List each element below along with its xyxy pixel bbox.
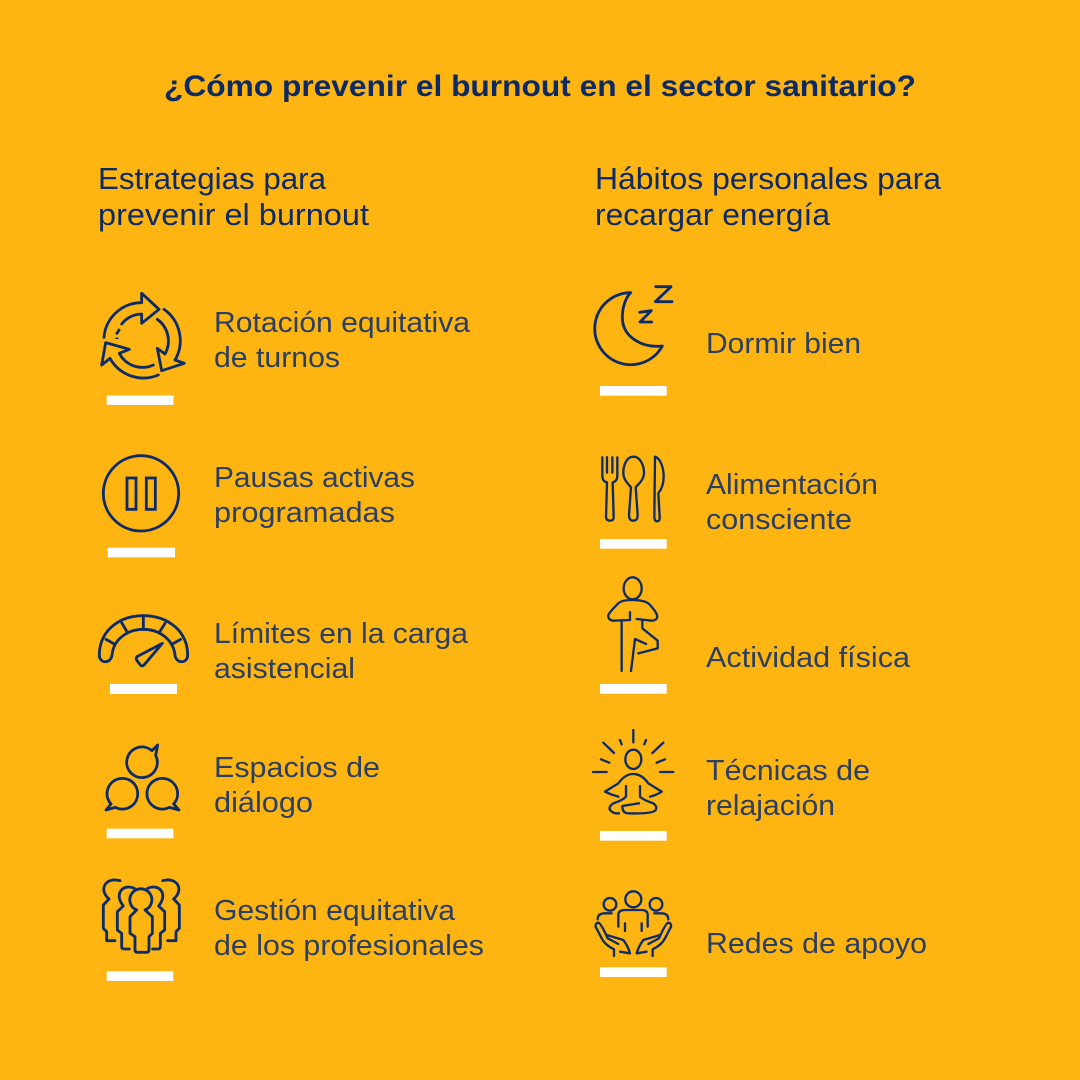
panel: hábitos xyxy=(593,161,942,977)
text: dormir: Dormir bien xyxy=(706,328,861,360)
item: rotación xyxy=(102,293,471,405)
text: redes: Redes de apoyo xyxy=(706,928,927,960)
panel: estrategias xyxy=(98,161,484,981)
text: espacios: Espacios de xyxy=(214,752,380,784)
item: gestión xyxy=(103,880,484,981)
item: actividad xyxy=(600,577,911,694)
item: límites xyxy=(99,616,469,694)
text: alimentación: Alimentación xyxy=(706,469,878,501)
heading: hábitos: Hábitos personales para xyxy=(595,161,942,196)
heading: estrategias: prevenir el burnout xyxy=(98,197,369,232)
icon: group of people xyxy=(103,880,179,952)
text: espacios xyxy=(214,752,380,819)
text: actividad: Actividad física xyxy=(706,642,911,674)
icon: cutlery xyxy=(602,457,664,521)
icon: speech bubbles xyxy=(106,745,179,810)
text: alimentación: consciente xyxy=(706,504,852,536)
item: espacios xyxy=(106,745,380,838)
icon: tree pose xyxy=(608,577,658,671)
icon: moon xyxy=(595,287,672,365)
text: rotación xyxy=(214,307,471,374)
text: técnicas: relajación xyxy=(706,790,835,822)
heading: estrategias xyxy=(98,161,369,232)
text: técnicas: Técnicas de xyxy=(706,755,870,787)
icon: gauge xyxy=(99,616,188,666)
text: gestión: de los profesionales xyxy=(214,930,484,962)
item: técnicas xyxy=(593,730,870,841)
text: pausas: programadas xyxy=(214,497,395,529)
text: pausas xyxy=(214,462,415,529)
text: pausas: Pausas activas xyxy=(214,462,415,494)
text: rotación: Rotación equitativa xyxy=(214,307,471,339)
heading: hábitos xyxy=(595,161,942,232)
item: pausas xyxy=(103,456,415,557)
text: límites: Límites en la carga xyxy=(214,618,469,650)
text: gestión xyxy=(214,895,484,962)
heading: estrategias: Estrategias para xyxy=(98,161,327,196)
text: límites: asistencial xyxy=(214,653,355,685)
item: redes xyxy=(596,891,927,977)
text: espacios: diálogo xyxy=(214,787,313,819)
icon: rotating arrows xyxy=(102,293,184,378)
item: dormir xyxy=(595,287,861,396)
text: alimentación xyxy=(706,469,878,536)
icon: pause xyxy=(103,456,179,531)
text: límites xyxy=(214,618,469,685)
item: alimentación xyxy=(600,457,878,549)
title: ¿Cómo prevenir el burnout en el sector sanitario? xyxy=(164,70,916,103)
heading: hábitos: recargar energía xyxy=(595,197,831,232)
text: gestión: Gestión equitativa xyxy=(214,895,456,927)
icon: meditation xyxy=(593,730,673,813)
text: técnicas xyxy=(706,755,870,822)
icon: people in hands xyxy=(596,891,671,956)
text: rotación: de turnos xyxy=(214,342,340,374)
